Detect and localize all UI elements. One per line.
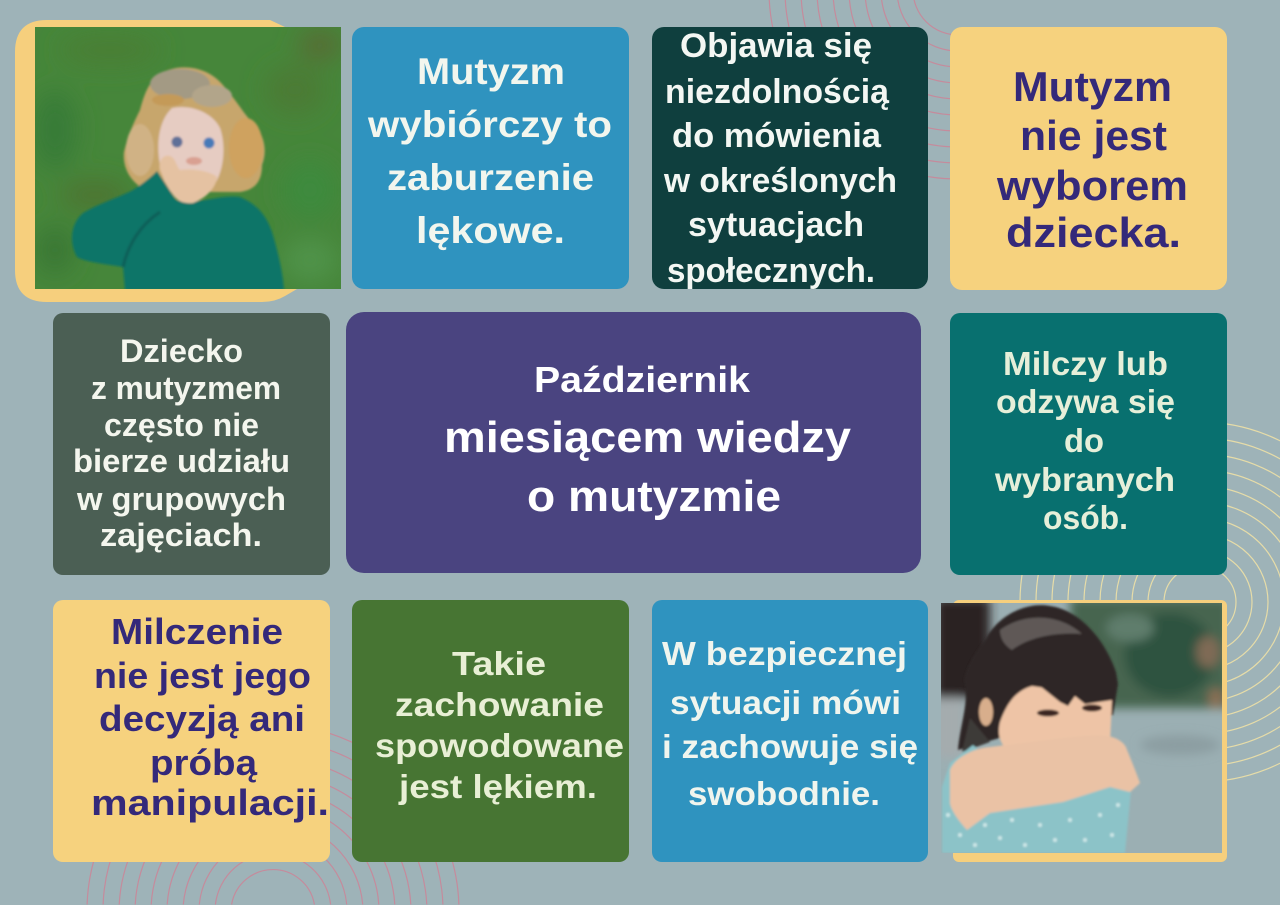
hair bbox=[958, 605, 1118, 750]
face bbox=[999, 686, 1112, 752]
panel: green anxiety bbox=[352, 600, 629, 862]
title: miesiącem wiedzy bbox=[444, 413, 852, 462]
text: symptom: Objawia się bbox=[680, 27, 872, 65]
face bbox=[158, 107, 223, 182]
panel: dark symptom bbox=[652, 27, 928, 290]
text: symptom: sytuacjach bbox=[688, 206, 864, 244]
text: group activities: zajęciach. bbox=[100, 517, 262, 553]
text: silent bbox=[994, 345, 1175, 536]
text: silent: do bbox=[1064, 422, 1104, 459]
text: safe situation: i zachowuje się bbox=[662, 728, 918, 765]
text: silent: Milczy lub bbox=[1003, 345, 1168, 382]
text: silent: odzywa się bbox=[996, 383, 1175, 420]
text: silent: osób. bbox=[1043, 499, 1128, 536]
text: definition: zaburzenie bbox=[387, 157, 594, 198]
panel: teal silent bbox=[950, 313, 1227, 575]
title: o mutyzmie bbox=[527, 472, 781, 521]
text: symptom: do mówienia bbox=[672, 117, 882, 155]
text: not a choice: dziecka. bbox=[1006, 209, 1181, 256]
text: not a choice: Mutyzm bbox=[1013, 63, 1172, 110]
text: silence: manipulacji. bbox=[91, 782, 329, 823]
text: silence: decyzją ani bbox=[99, 698, 305, 739]
panel: blue definition bbox=[352, 27, 629, 289]
dress bbox=[942, 745, 1132, 853]
text: definition bbox=[367, 51, 612, 251]
text: anxiety: spowodowane bbox=[375, 727, 624, 764]
panel: blue safe situation bbox=[652, 600, 928, 862]
text: safe situation: sytuacji mówi bbox=[670, 684, 901, 721]
text: anxiety: Takie bbox=[452, 645, 546, 682]
text: silent: wybranych bbox=[994, 461, 1175, 498]
text: not a choice: wyborem bbox=[996, 162, 1188, 209]
text: group activities bbox=[73, 333, 290, 553]
photo panel: dark-haired child hiding behind arm bbox=[935, 598, 1230, 862]
text: group activities: w grupowych bbox=[76, 481, 286, 517]
text: silence: nie jest jego bbox=[94, 655, 311, 696]
hand bbox=[160, 156, 217, 203]
text: safe situation bbox=[662, 635, 918, 812]
text: not a choice bbox=[996, 63, 1188, 256]
text: symptom bbox=[663, 27, 897, 290]
text: anxiety: jest lękiem. bbox=[398, 768, 597, 805]
text: definition: wybiórczy to bbox=[367, 104, 612, 145]
sweater bbox=[72, 171, 284, 290]
ear and braid bbox=[979, 698, 993, 726]
text: group activities: często nie bbox=[104, 407, 259, 443]
photo panel: blonde child covering mouth bbox=[15, 20, 342, 302]
dress dots bbox=[946, 803, 1120, 847]
text: safe situation: swobodnie. bbox=[688, 775, 880, 812]
text: definition: Mutyzm bbox=[417, 51, 565, 92]
text: silence bbox=[91, 611, 329, 823]
text: not a choice: nie jest bbox=[1020, 112, 1167, 159]
text: anxiety bbox=[375, 645, 624, 805]
decorative arcs: top bbox=[768, 0, 951, 180]
text: symptom: społecznych. bbox=[667, 252, 875, 290]
text: silence: Milczenie bbox=[111, 611, 283, 652]
text: anxiety: zachowanie bbox=[395, 686, 604, 723]
text: group activities: Dziecko bbox=[120, 333, 243, 369]
text: group activities: bierze udziału bbox=[73, 443, 290, 479]
panel: yellow not a choice bbox=[950, 27, 1227, 290]
text: symptom: niezdolnością bbox=[665, 73, 890, 111]
panel: yellow silence bbox=[53, 600, 330, 862]
panel: group activities bbox=[53, 313, 330, 575]
text: group activities: z mutyzmem bbox=[91, 370, 281, 406]
panel: central title bbox=[346, 312, 921, 573]
title bbox=[444, 359, 852, 521]
title: Październik bbox=[534, 359, 751, 400]
arm bbox=[950, 735, 1140, 830]
decorative arcs: bottom left bbox=[87, 725, 459, 904]
text: safe situation: W bezpiecznej bbox=[662, 635, 907, 672]
hair bbox=[124, 67, 265, 192]
text: silence: próbą bbox=[150, 742, 258, 783]
text: symptom: w określonych bbox=[663, 162, 897, 200]
decorative arcs: right bbox=[1020, 422, 1280, 782]
text: definition: lękowe. bbox=[416, 210, 565, 251]
